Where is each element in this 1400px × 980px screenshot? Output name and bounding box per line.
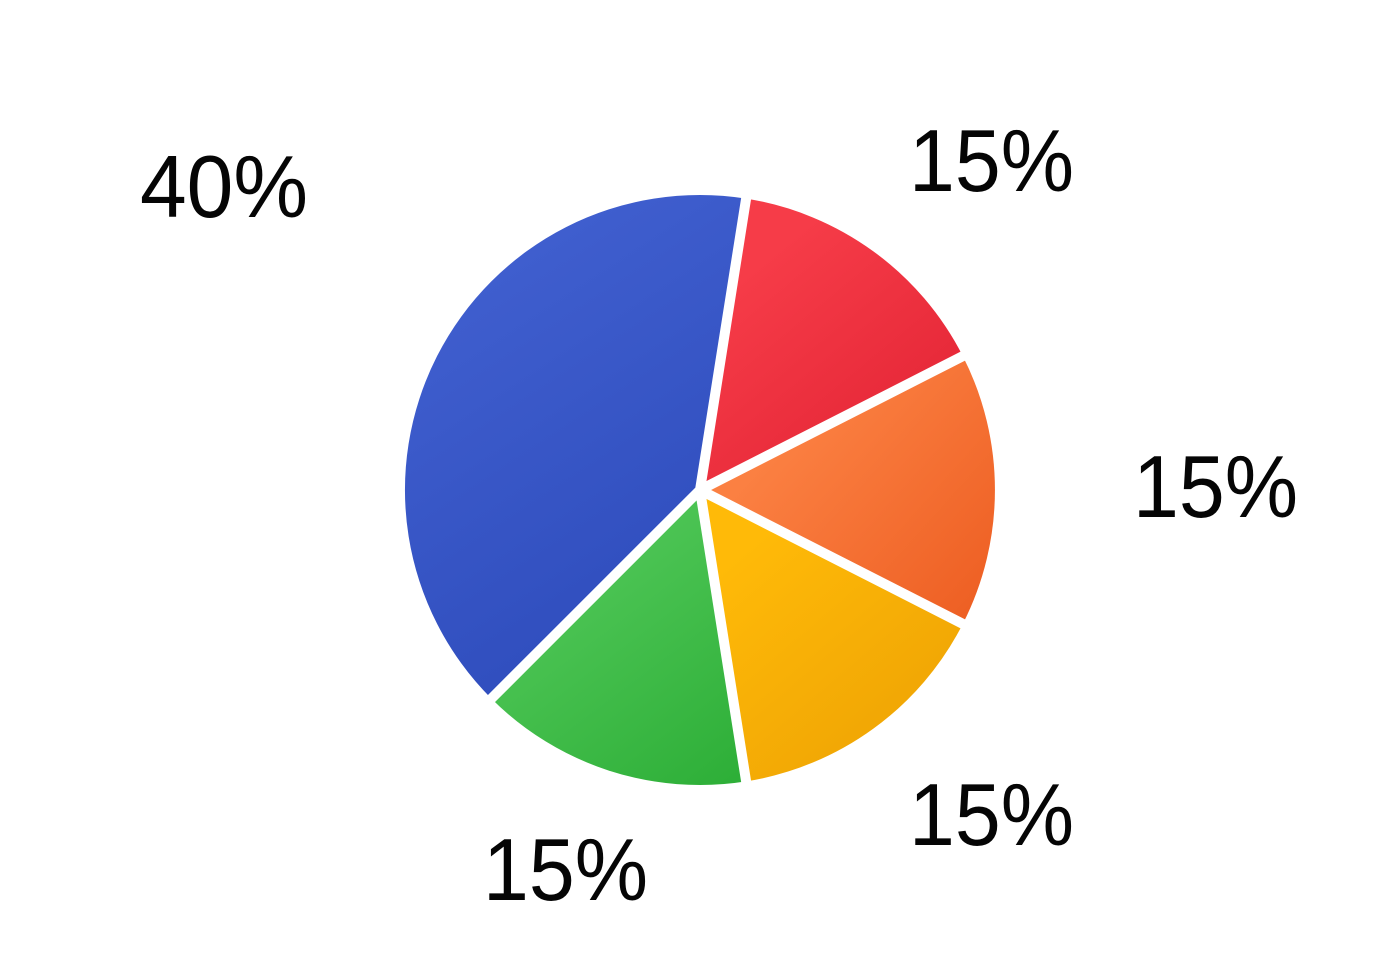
- slice: orange 15%: [700, 356, 995, 624]
- label: yellow 15%: 15%: [909, 765, 1074, 864]
- slice: yellow 15%: [700, 490, 963, 781]
- pie chart: [405, 193, 995, 787]
- label: orange 15%: 15%: [1133, 437, 1298, 536]
- slice: red 15%: [700, 199, 963, 490]
- slice: blue 40%: [405, 195, 746, 699]
- slice: green 15%: [491, 490, 746, 785]
- label: blue 40%: 40%: [140, 137, 308, 236]
- label: red 15%: 15%: [909, 111, 1074, 210]
- label: green 15%: 15%: [483, 820, 648, 919]
